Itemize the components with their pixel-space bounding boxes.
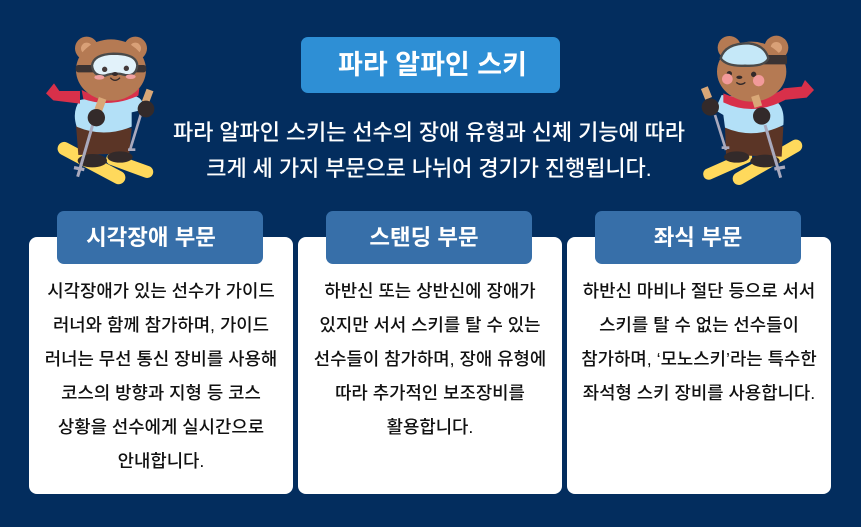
panel: sitting: 스키를 탈 수 없는 선수들이	[599, 315, 799, 335]
panel: standing: 있지만 서서 스키를 탈 수 있는	[319, 315, 540, 335]
heading: sitting	[595, 211, 801, 264]
panel: standing	[298, 237, 562, 494]
panel: visual impairment: 상황을 선수에게 실시간으로	[58, 417, 264, 437]
heading: visual impairment: 시각장애 부문	[86, 225, 216, 250]
panel: sitting	[567, 237, 831, 494]
heading: sitting: 좌식 부문	[654, 225, 742, 250]
panel: standing: 활용합니다.	[387, 417, 473, 437]
intro text: 파라 알파인 스키는 선수의 장애 유형과 신체 기능에 따라	[173, 120, 685, 145]
panel: visual impairment: 러너와 함께 참가하며, 가이드	[53, 315, 269, 335]
panel: visual impairment: 안내합니다.	[118, 451, 204, 471]
title	[301, 37, 560, 93]
panel: visual impairment: 러너는 무선 통신 장비를 사용해	[45, 349, 277, 369]
intro text: 크게 세 가지 부문으로 나뉘어 경기가 진행됩니다.	[206, 156, 652, 181]
panel: sitting: 참가하며, ‘모노스키’라는 특수한	[581, 349, 817, 369]
icon: left skiing bear	[46, 36, 154, 184]
intro text	[173, 120, 685, 181]
panel: standing: 따라 추가적인 보조장비를	[335, 383, 525, 403]
panel: visual impairment: 코스의 방향과 지형 등 코스	[61, 383, 261, 403]
title: 파라 알파인 스키	[338, 50, 527, 80]
heading: visual impairment	[57, 211, 263, 264]
panel: standing: 하반신 또는 상반신에 장애가	[324, 281, 536, 301]
panel: standing: 선수들이 참가하며, 장애 유형에	[314, 349, 546, 369]
panel: visual impairment: 시각장애가 있는 선수가 가이드	[47, 281, 275, 301]
panel: sitting: 하반신 마비나 절단 등으로 서서	[583, 281, 815, 301]
heading: standing: 스탠딩 부문	[369, 225, 479, 250]
icon: right skiing bear	[701, 36, 814, 185]
panel: sitting: 좌석형 스키 장비를 사용합니다.	[583, 383, 815, 403]
heading: standing	[326, 211, 532, 264]
panel: visual impairment	[29, 237, 293, 494]
